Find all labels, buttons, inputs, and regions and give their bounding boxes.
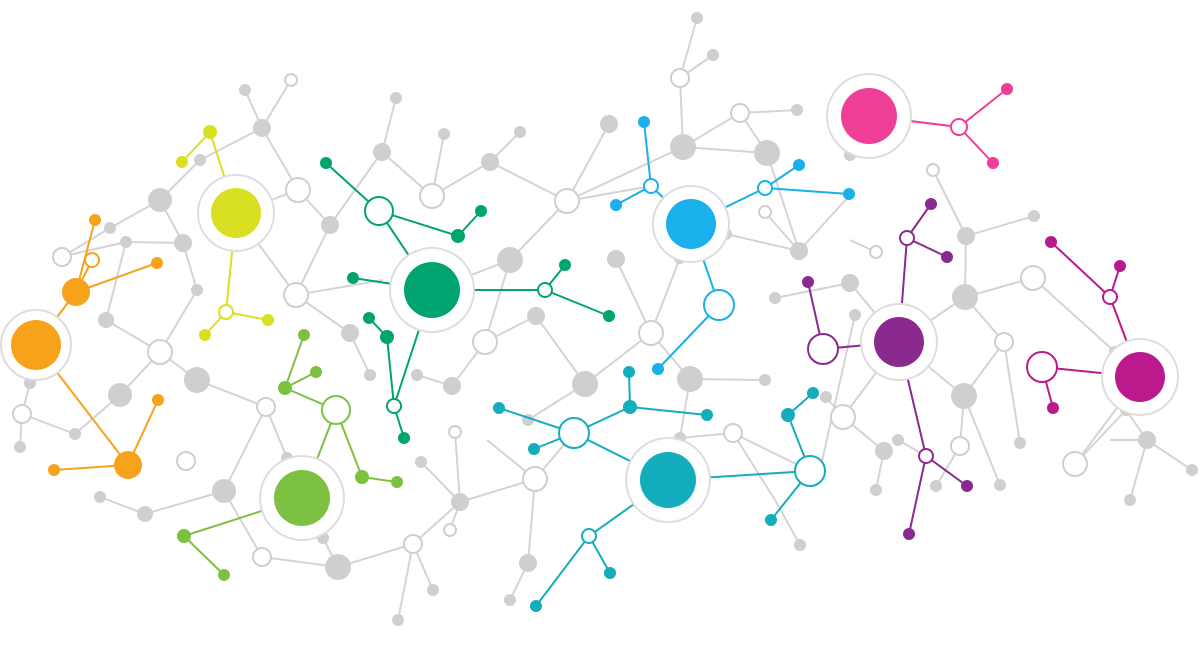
cluster: lime green [177, 329, 403, 581]
cluster: blue [610, 116, 855, 375]
cluster: green [320, 157, 615, 444]
cluster: magenta [1027, 236, 1178, 415]
cluster: orange [1, 214, 164, 479]
cluster: purple [802, 198, 973, 540]
gray hollow nodes [13, 69, 1087, 566]
cluster: pink [827, 74, 1013, 169]
cluster: yellow [176, 125, 274, 341]
cluster: cyan [493, 366, 825, 612]
